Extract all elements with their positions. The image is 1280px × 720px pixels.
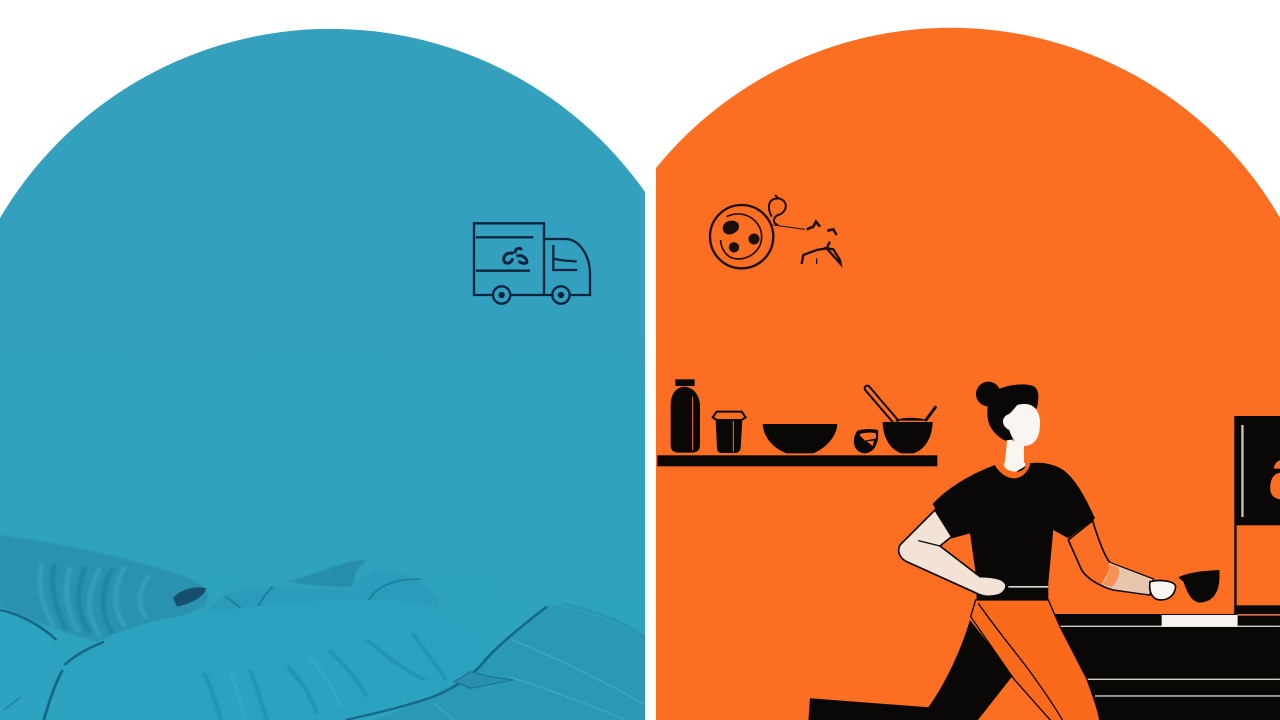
front pillow: [98, 600, 483, 720]
hair: [976, 382, 1038, 441]
mixing bowl with spoon: [867, 388, 935, 453]
left pillow: [4, 696, 22, 710]
sheet tag: [454, 672, 513, 688]
small glass: [854, 429, 878, 453]
panel: blue arch with bedding: [0, 0, 648, 720]
back left pillow: [0, 535, 208, 643]
face: [1003, 404, 1040, 446]
bottle: [671, 379, 700, 453]
back leg: [808, 620, 1013, 720]
cup: [1178, 570, 1220, 603]
belt line: [1008, 586, 1048, 588]
shelf with containers: [657, 379, 937, 466]
right pillow: [375, 604, 648, 720]
dark creases: [0, 607, 547, 720]
panel: orange arch with kitchen scene: [656, 0, 1280, 720]
kitchen counter: [1055, 614, 1280, 720]
neck: [1004, 438, 1025, 472]
person running with a cup: [808, 382, 1220, 720]
bedding photograph: [0, 535, 648, 720]
right arm: [1068, 521, 1153, 595]
middle rumpled sheet: [224, 560, 421, 608]
collar: [995, 463, 1030, 478]
appliance: [1234, 416, 1280, 614]
hand: [1150, 581, 1176, 600]
icon: delivery truck: [474, 223, 590, 304]
icon: plate with food and mound: [710, 195, 841, 268]
left arm: [899, 510, 1006, 596]
shirt: [933, 463, 1095, 600]
cup: [713, 412, 746, 453]
front leg: [971, 600, 1100, 720]
large bowl: [763, 424, 837, 453]
